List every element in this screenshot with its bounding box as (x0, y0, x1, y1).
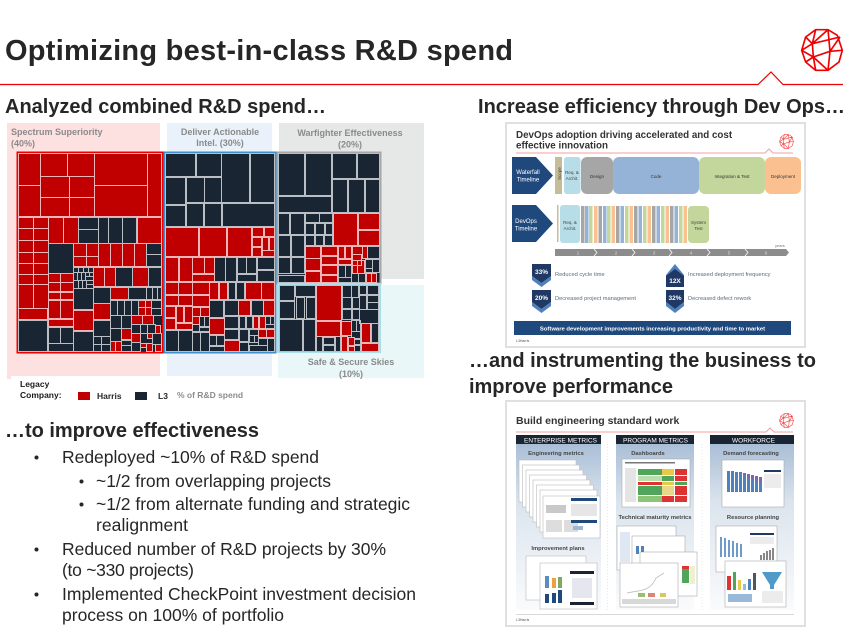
icon: logo globe (802, 30, 842, 70)
column: workforce: Resource planning (727, 515, 780, 521)
waterfall timeline: Deployment (771, 174, 796, 179)
banner (514, 321, 791, 335)
metric badge: 32%: Decreased defect rework (688, 296, 751, 302)
waterfall timeline: Waterfall (516, 170, 540, 176)
treemap: deliver actionable intel (164, 152, 276, 352)
header rule with peak (0, 72, 843, 84)
metric badge: 33%: Reduced cycle time (555, 272, 605, 278)
devops timeline: System (691, 220, 706, 225)
legend: Harris (97, 391, 122, 401)
slide title: effective innovation (516, 140, 608, 152)
metric badge: 33%: 33% (535, 269, 548, 276)
column: workforce: Demand forecasting (723, 451, 779, 457)
waterfall timeline: Design (590, 174, 604, 179)
label: warfighter effectiveness: Warfighter Effectiveness (297, 128, 403, 138)
stacked slides (519, 460, 600, 538)
label: deliver actionable intel: Intel. (30%) (196, 138, 244, 148)
years arrow: 5 (728, 250, 731, 256)
heading: instrumenting the business (469, 350, 816, 398)
maturity slides (617, 526, 697, 607)
label: warfighter effectiveness: (20%) (338, 140, 362, 150)
waterfall timeline: Code (651, 174, 662, 179)
heading: instrumenting the business: improve performance (469, 376, 673, 398)
legend: Company: (20, 390, 62, 400)
column: program metrics (616, 435, 697, 610)
devops timeline: Test (694, 226, 703, 231)
treemap: warfighter effectiveness (278, 152, 380, 284)
devops timeline: Timeline (515, 226, 538, 232)
metric badge: 12X: Increased deployment frequency (688, 272, 771, 278)
devops timeline: Archit. (564, 226, 576, 231)
column: workforce (710, 435, 794, 610)
icon: small logo (780, 414, 793, 427)
devops timeline: Req. & (563, 220, 577, 225)
mask behind legend (11, 376, 271, 396)
column: enterprise metrics: ENTERPRISE METRICS (524, 438, 598, 444)
years arrow: 6 (765, 250, 768, 256)
improvement slides (526, 556, 597, 609)
bullet list: Reduced number of R&D projects by 30% (62, 539, 386, 559)
panel: devops slide (506, 123, 805, 347)
legend: L3 (158, 391, 168, 401)
devops timeline (512, 205, 709, 243)
treemap: spectrum superiority (18, 152, 163, 352)
dashboard thumbnail (622, 459, 690, 507)
resource slides (716, 526, 777, 572)
years arrow: years (775, 243, 785, 248)
footer mark: L3Harris (516, 618, 529, 622)
bullet list: realignment (96, 515, 188, 535)
label: deliver actionable intel: Deliver Actionable (181, 127, 259, 137)
waterfall timeline: Req. & (565, 170, 579, 175)
bullet list: Implemented CheckPoint investment decision (62, 584, 416, 604)
waterfall timeline: Archit. (566, 176, 578, 181)
metric badge: 20%: 20% (535, 295, 548, 302)
column: enterprise metrics: Engineering metrics (528, 451, 584, 457)
legend swatch: l3 (135, 392, 147, 400)
metric badge: 12X (666, 264, 771, 287)
metric badge: 12X: 12X (669, 278, 681, 285)
label: spectrum superiority: Spectrum Superiority (11, 127, 103, 137)
footer mark: L3Harris (516, 339, 529, 343)
metric badge: 20% (532, 290, 636, 313)
years arrow: 1 (577, 250, 580, 256)
waterfall timeline: Integration & Test (715, 174, 750, 179)
bullet list: Redeployed ~10% of R&D spend (62, 447, 319, 467)
label: safe and secure skies: Safe & Secure Skies (308, 357, 394, 367)
years arrow: 3 (653, 250, 656, 256)
heading: increase efficiency through dev ops: Increase efficiency through Dev Ops… (478, 96, 845, 118)
legend: % of R&D spend (177, 390, 243, 400)
bullet list: ~1/2 from overlapping projects (96, 471, 331, 491)
years arrow: 4 (690, 250, 693, 256)
column: program metrics: Dashboards (631, 451, 665, 457)
heading: improve effectiveness: …to improve effectiveness (5, 420, 259, 442)
metric badge: 32%: 32% (668, 295, 682, 302)
metric badge: 33% (532, 264, 605, 287)
metric badge: 32% (666, 290, 751, 313)
heading: analyzed combined spend: Analyzed combined R&D spend… (5, 96, 326, 118)
legend swatch: harris (78, 392, 90, 400)
title: Optimizing best-in-class R&D spend (5, 35, 513, 67)
legend (20, 379, 243, 401)
column: program metrics: Technical maturity metrics (618, 515, 692, 521)
devops timeline: DevOps (515, 219, 537, 225)
label: safe and secure skies: (10%) (339, 369, 363, 379)
years arrow (555, 243, 789, 256)
waterfall timeline: Timeline (517, 178, 540, 184)
metric badge: 20%: Decreased project management (555, 296, 636, 302)
legend: Legacy (20, 379, 49, 389)
years arrow: 2 (615, 250, 618, 256)
column: enterprise metrics (516, 435, 601, 610)
demand chart thumbnail (722, 460, 784, 507)
waterfall timeline: Scope (557, 167, 562, 180)
treemap: safe and secure skies (278, 284, 380, 352)
banner: Software development improvements increasing productivity and time to market (540, 326, 765, 332)
bullet list (34, 447, 416, 625)
panel backgrounds (7, 123, 424, 379)
column: workforce: WORKFORCE (732, 438, 776, 444)
bullet list: (to ~330 projects) (62, 560, 194, 580)
label: spectrum superiority: (40%) (11, 138, 35, 148)
waterfall timeline (512, 157, 801, 194)
bullet list: ~1/2 from alternate funding and strategic (96, 494, 410, 514)
icon: small logo (780, 135, 793, 148)
slide title: Build engineering standard work (516, 415, 680, 427)
bullet list: process on 100% of portfolio (62, 605, 284, 625)
slide title: DevOps adoption driving accelerated and cost (516, 130, 732, 141)
column: enterprise metrics: Improvement plans (531, 546, 585, 552)
column: program metrics: PROGRAM METRICS (623, 438, 689, 444)
panel: standard work slide (506, 401, 805, 626)
treemap chart (7, 123, 424, 396)
heading: instrumenting the business: …and instrumenting the business to (469, 350, 816, 372)
